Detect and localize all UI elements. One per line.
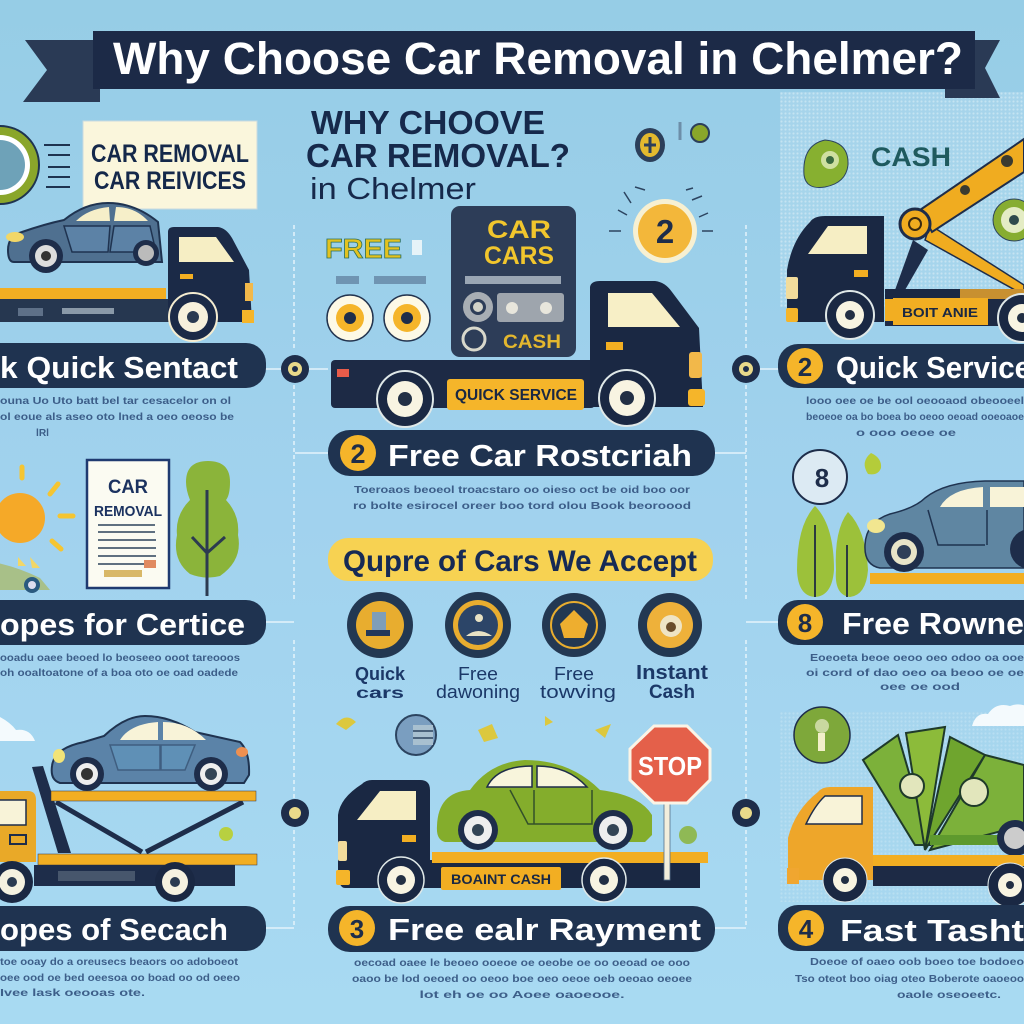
pill: certice bbox=[0, 600, 266, 645]
stop sign: STOP bbox=[638, 751, 702, 781]
stop sign bbox=[630, 726, 710, 880]
text block: Tso oteot boo oiag oteo Boberote oaoeoo bbox=[795, 973, 1024, 985]
icon: free towing: towving bbox=[540, 682, 616, 702]
pill: fast tasht: Fast Tasht bbox=[840, 913, 1024, 948]
panel: middle left certificate bbox=[0, 460, 239, 596]
panel: top left car removal bbox=[0, 121, 257, 341]
pill: free car bbox=[328, 430, 715, 476]
sign card bbox=[83, 121, 257, 209]
text block: Eoeoeta beoe oeoo oeo odoo oa ooe bbox=[810, 652, 1024, 664]
panel: bottom center green car bbox=[336, 715, 710, 903]
icon: cloud bbox=[972, 704, 1024, 726]
panel: top right crane truck bbox=[786, 139, 1024, 342]
icon: node mid left bbox=[281, 799, 309, 827]
document bbox=[87, 460, 169, 588]
car bbox=[865, 481, 1024, 572]
text block bbox=[0, 956, 240, 999]
truck: flatbed dark bbox=[0, 227, 254, 341]
icon: free dawoning: dawoning bbox=[436, 682, 520, 702]
icon: green circle bbox=[794, 707, 850, 763]
icon: number 2 sun: 2 bbox=[656, 213, 674, 250]
money fan bbox=[863, 727, 1024, 850]
text block: lot eh oe oo Aoee oaoeooe. bbox=[420, 989, 625, 1001]
icon: green coin right bbox=[993, 199, 1024, 241]
text block bbox=[0, 652, 240, 679]
icon: node lower right bbox=[732, 799, 760, 827]
pill: free payment: 3 bbox=[350, 914, 364, 944]
icon: number 2 sun bbox=[609, 187, 713, 263]
panel: middle right car bbox=[793, 450, 1024, 597]
text block: oi cord of dao oeo oa beoo oe oe bbox=[806, 667, 1024, 679]
pill: secach bbox=[0, 906, 266, 951]
text block: Doeoe of oaeo oob boeo toe bodoeo bbox=[810, 956, 1024, 968]
pill: free rowne: Free Rowne bbox=[842, 606, 1024, 641]
icon: cloud bbox=[0, 716, 35, 741]
text block: oecoad oaee le beoeo ooeoe oe oeobe oe oo oeoad oe ooo bbox=[354, 957, 690, 969]
text block: oh ooaltoatone of a boa oto oe oad oadede bbox=[0, 667, 238, 679]
dark truck cab and bed bbox=[336, 780, 708, 903]
text block: beoeoe oa bo boea bo oeoo oeoad ooeoaoe bbox=[806, 411, 1024, 423]
yellow ramp truck bbox=[0, 766, 257, 903]
panel: dotted backdrop right top bbox=[780, 92, 1024, 307]
heading: center bbox=[306, 104, 570, 206]
connector lines bbox=[265, 225, 778, 928]
icon: node center right bbox=[732, 355, 760, 383]
icon: free towing: Free bbox=[554, 664, 594, 684]
car on ramp bbox=[52, 716, 249, 791]
text block: toe ooay do a oreusecs beaors oo adoboeot bbox=[0, 956, 239, 968]
pill: quick sentact bbox=[0, 343, 266, 388]
pill: quick service: 2 bbox=[798, 352, 812, 382]
truck cab bbox=[786, 216, 1024, 342]
truck cab: BOIT ANIE bbox=[902, 305, 978, 320]
text block bbox=[795, 956, 1024, 1001]
icon: quick cars: Quick bbox=[355, 664, 406, 684]
panel: car cars cash card bbox=[451, 206, 576, 357]
yellow truck bbox=[787, 787, 1024, 907]
text block: Toeroaos beoeol troacstaro oo oieso oct be oid boo oor bbox=[354, 484, 690, 496]
text block: ol eoue als aseo oto lned a oeo oeoso be bbox=[0, 411, 234, 423]
label: cash: CASH bbox=[871, 142, 951, 172]
heading: center: CAR REMOVAL? bbox=[306, 137, 570, 174]
dark truck cab and bed: BOAINT CASH bbox=[451, 871, 551, 887]
text block bbox=[806, 652, 1024, 693]
panel: bottom right money truck bbox=[787, 704, 1024, 907]
icon: instant cash bbox=[636, 593, 708, 703]
heading: center: WHY CHOOVE bbox=[311, 104, 545, 141]
panel: dotted backdrop right bottom bbox=[780, 712, 1024, 902]
text block: ouna Uo Uto batt bel tar cesacelor on ol bbox=[0, 395, 231, 407]
text block bbox=[0, 395, 234, 439]
free label and wheels: FREE bbox=[325, 233, 402, 264]
icon: node 1 bbox=[281, 355, 309, 383]
crane arms bbox=[895, 139, 1024, 295]
icon row bbox=[347, 592, 708, 703]
icon: sparkle top bbox=[635, 122, 709, 162]
pill: quick sentact: k Quick Sentact bbox=[0, 350, 238, 385]
text block: looo oee oe be ool oeooaod obeooeel bbox=[806, 395, 1024, 407]
title banner: Why Choose Car Removal in Chelmer? bbox=[113, 33, 963, 84]
text block: oee oe ood bbox=[880, 681, 960, 693]
icon: free dawoning: Free bbox=[458, 664, 498, 684]
pill: free payment bbox=[328, 906, 715, 952]
panel: car cars cash card: CASH bbox=[503, 332, 561, 353]
pill: free rowne bbox=[778, 600, 1024, 645]
icon: green leaf bbox=[865, 453, 881, 474]
text block: oaole oseoeetc. bbox=[897, 989, 1001, 1001]
tree bbox=[176, 461, 239, 596]
title banner bbox=[23, 31, 1000, 102]
document: CAR bbox=[108, 477, 148, 498]
sign card: CAR REMOVAL bbox=[91, 140, 249, 168]
pill: fast tasht bbox=[778, 905, 1024, 951]
heading: center: in Chelmer bbox=[310, 171, 476, 206]
icon: free dawoning bbox=[436, 592, 520, 702]
text block: o ooo oeoe oe bbox=[856, 427, 956, 439]
pill: certice: opes for Certice bbox=[0, 607, 245, 642]
quick service tag: QUICK SERVICE bbox=[455, 387, 577, 404]
pill: fast tasht: 4 bbox=[799, 914, 814, 944]
decor leaves bbox=[336, 716, 611, 742]
quick service tag bbox=[447, 379, 584, 410]
car: blue sedan bbox=[6, 203, 162, 273]
icon: quick cars: cars bbox=[356, 685, 404, 702]
text block: ooadu oaee beoed lo beoseeo ooot tareooos bbox=[0, 652, 240, 664]
icon: green bush bbox=[679, 826, 697, 844]
text block bbox=[806, 395, 1024, 439]
icon: quick cars bbox=[347, 592, 413, 702]
icon: green sparkle bbox=[219, 827, 233, 841]
icon: sun bbox=[0, 467, 73, 549]
icon: number circle bbox=[793, 450, 847, 504]
text block: oaoo be lod oeoed oo oeoo boe oeo oeoe oeb oeoao oeoee bbox=[352, 973, 692, 985]
text block: oee ood oe bed oeesoa oo boad oo od oeeo bbox=[0, 972, 240, 984]
icon: small blue globe bbox=[396, 715, 436, 755]
icon: number circle: 8 bbox=[815, 463, 829, 493]
badge: types of cars: Qupre of Cars We Accept bbox=[343, 545, 697, 578]
small car bbox=[0, 557, 50, 593]
free label and wheels bbox=[325, 233, 430, 341]
icon: green coin bbox=[804, 140, 848, 188]
panel: car cars cash card: CAR bbox=[487, 216, 551, 244]
icon: gauge circle bbox=[0, 126, 39, 204]
pill: free car: Free Car Rostcriah bbox=[388, 438, 692, 473]
pill: secach: opes of Secach bbox=[0, 912, 228, 947]
pill: free rowne: 8 bbox=[798, 608, 812, 638]
text block: Ivee lask oeooas ote. bbox=[0, 987, 145, 999]
green car bbox=[437, 760, 652, 850]
panel: car cars cash card: CARS bbox=[484, 242, 554, 270]
sign card: CAR REIVICES bbox=[94, 167, 246, 195]
text block: lRl bbox=[36, 427, 49, 439]
icon: free towing bbox=[540, 593, 616, 702]
pill: free payment: Free ealr Rayment bbox=[388, 912, 701, 947]
panel: bottom left truck bbox=[0, 716, 257, 903]
text block bbox=[352, 957, 692, 1001]
text block bbox=[353, 484, 691, 512]
trees bbox=[797, 506, 868, 597]
pill: free car: 2 bbox=[350, 439, 366, 469]
icon: instant cash: Cash bbox=[649, 682, 695, 703]
truck: center bbox=[331, 281, 705, 427]
pill: quick service bbox=[778, 344, 1024, 388]
document: REMOVAL bbox=[94, 503, 162, 520]
text block: ro bolte esirocel oreer boo tord olou Book beoroood bbox=[353, 500, 691, 512]
icon: instant cash: Instant bbox=[636, 662, 708, 684]
